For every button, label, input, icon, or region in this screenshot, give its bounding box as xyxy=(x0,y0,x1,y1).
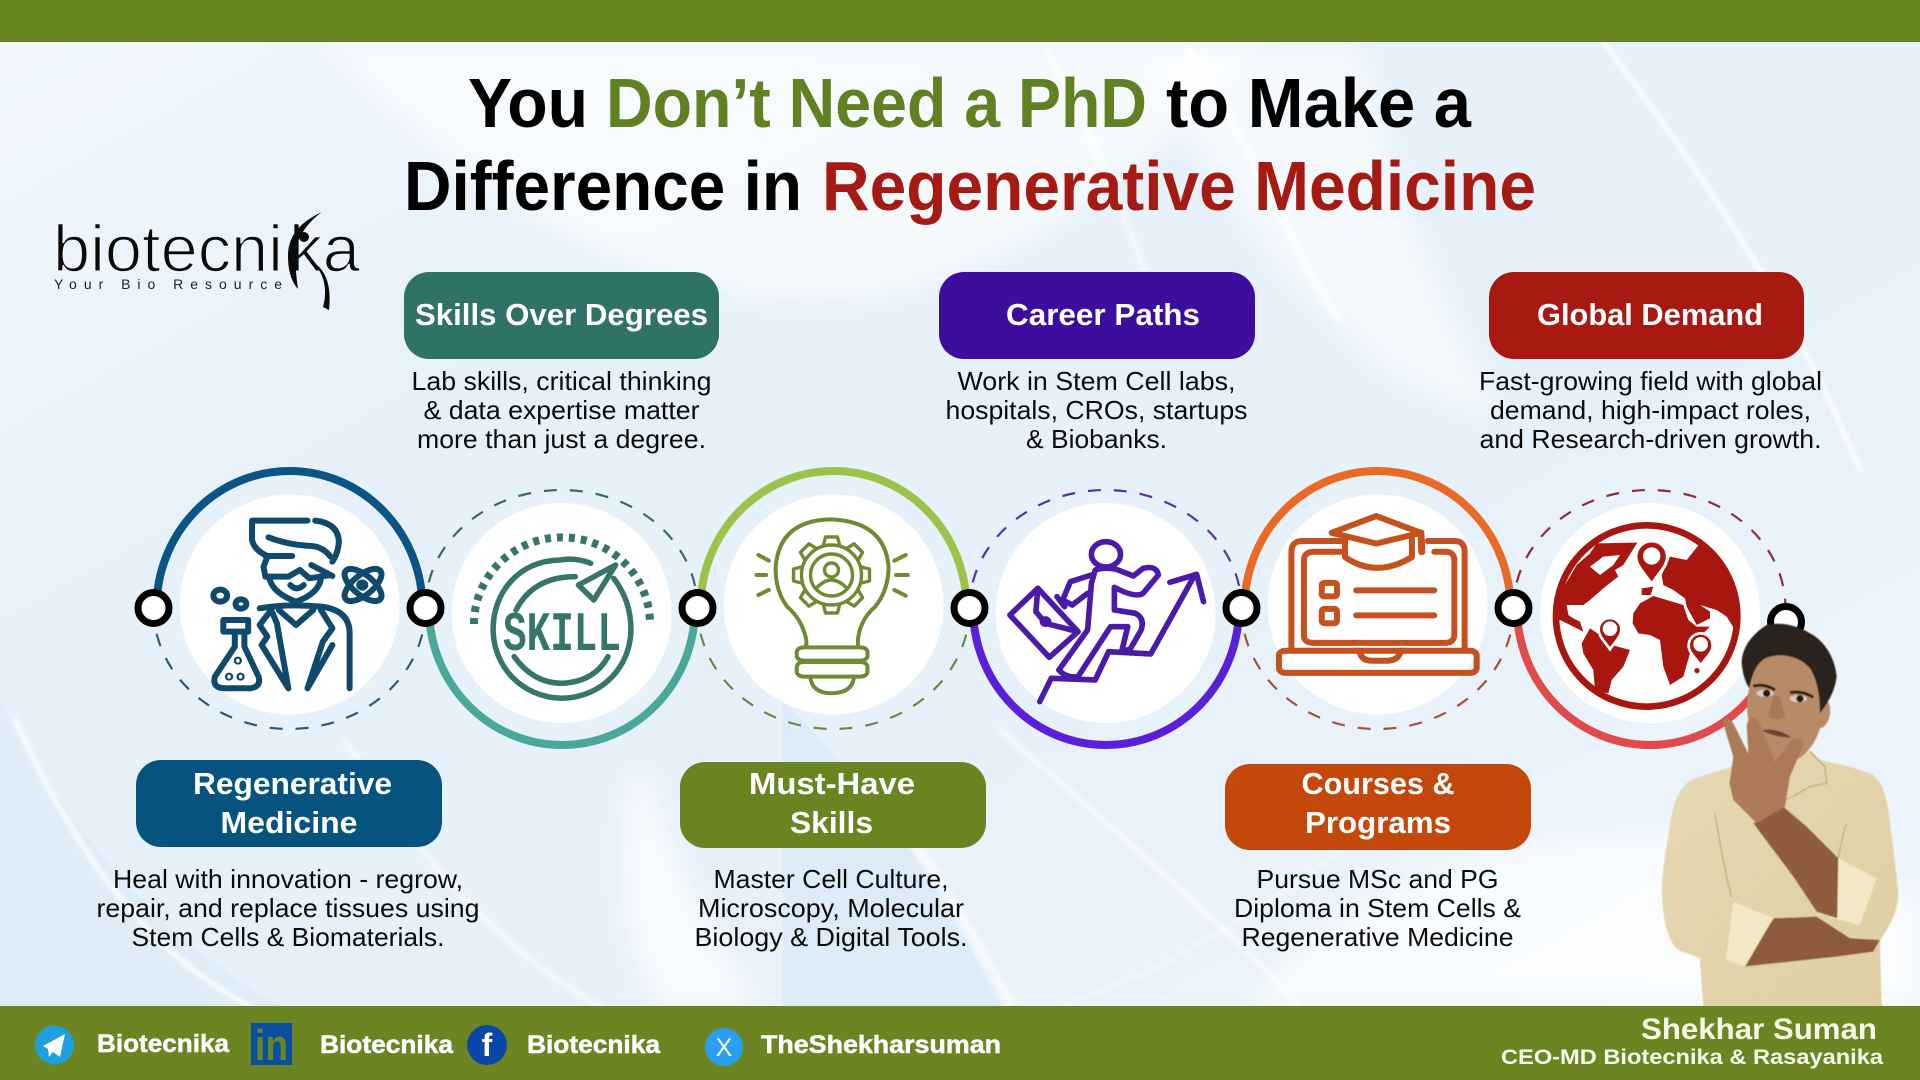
title: You xyxy=(468,64,588,142)
title: to Make a xyxy=(1166,64,1472,142)
text: Must-Have Skills description: Biology & Digital Tools. xyxy=(694,922,968,952)
timeline nodes xyxy=(138,592,1802,638)
text: Regenerative Medicine description: Heal with innovation - regrow, xyxy=(113,864,463,894)
icon: climbing career figure xyxy=(1010,542,1204,702)
icon: facebook: f xyxy=(482,1027,493,1063)
title: Difference in xyxy=(404,147,802,225)
pill: Skills Over Degrees: Skills Over Degrees xyxy=(415,297,708,332)
pill: Regenerative Medicine xyxy=(136,760,442,847)
text: Must-Have Skills description: Master Cell Culture, xyxy=(714,864,948,894)
author credit xyxy=(1501,1013,1883,1069)
icon: X xyxy=(705,1028,743,1066)
text: Global Demand description: Fast-growing field with global xyxy=(1479,366,1822,396)
pill: Courses and Programs xyxy=(1225,764,1531,850)
author credit: CEO-MD Biotecnika & Rasayanika xyxy=(1501,1046,1883,1069)
title: Regenerative Medicine xyxy=(822,147,1536,225)
dashed connector arcs xyxy=(154,490,1786,729)
pill: Skills Over Degrees xyxy=(404,272,719,359)
pill: Must-Have Skills: Must-Have xyxy=(749,766,915,801)
pill: Courses and Programs: Courses & xyxy=(1302,766,1454,801)
text: Skills Over Degrees description xyxy=(412,366,712,454)
icon: skill gauge: SKILL xyxy=(503,603,621,667)
label: LinkedIn handle: Biotecnika xyxy=(320,1031,454,1059)
text: Skills Over Degrees description: & data expertise matter xyxy=(424,395,700,425)
pill: Must-Have Skills: Skills xyxy=(790,805,873,840)
icon: skill gauge xyxy=(474,537,650,698)
pin: Europe xyxy=(1636,541,1667,584)
icon: X: X xyxy=(716,1034,733,1062)
text: Career Paths description xyxy=(946,366,1248,454)
text: Skills Over Degrees description: Lab skills, critical thinking xyxy=(412,366,712,396)
pin: South America xyxy=(1599,618,1621,649)
icon: facebook xyxy=(467,1025,507,1065)
pin: Africa xyxy=(1689,633,1713,665)
pill: Career Paths xyxy=(939,272,1255,359)
pill: Regenerative Medicine: Regenerative xyxy=(193,766,392,801)
text: Courses and Programs description: Regenerative Medicine xyxy=(1242,922,1514,952)
icon: globe with location pins xyxy=(1553,525,1743,707)
icon: light bulb with gear xyxy=(757,519,908,693)
text: Global Demand description xyxy=(1479,366,1822,454)
text: Regenerative Medicine description: Stem Cells & Biomaterials. xyxy=(132,922,444,952)
text: Skills Over Degrees description: more than just a degree. xyxy=(417,424,706,454)
pill: Global Demand xyxy=(1489,272,1804,359)
logo: biotecnika xyxy=(53,212,360,310)
pill: Global Demand: Global Demand xyxy=(1537,297,1763,332)
text: Career Paths description: & Biobanks. xyxy=(1026,424,1167,454)
title: Don’t Need a PhD xyxy=(606,64,1147,142)
top bar xyxy=(0,0,1920,42)
text: Courses and Programs description: Pursue MSc and PG xyxy=(1256,864,1498,894)
icon: laptop with graduation cap xyxy=(1279,516,1477,673)
text: Courses and Programs description: Diploma in Stem Cells & xyxy=(1234,893,1521,923)
pill: Must-Have Skills xyxy=(680,762,986,848)
logo: biotecnika: Your Bio Resource xyxy=(54,276,282,292)
label: Telegram handle: Biotecnika xyxy=(97,1030,230,1058)
text: Global Demand description: and Research-driven growth. xyxy=(1480,424,1822,454)
pill: Regenerative Medicine: Medicine xyxy=(220,805,358,840)
text: Global Demand description: demand, high-impact roles, xyxy=(1490,395,1811,425)
text: Courses and Programs description xyxy=(1234,864,1521,952)
text: Must-Have Skills description xyxy=(694,864,968,952)
title xyxy=(404,64,1536,225)
logo: biotecnika: biotecni xyxy=(53,212,283,286)
text: Regenerative Medicine description: repair, and replace tissues using xyxy=(96,893,480,923)
pill: Career Paths: Career Paths xyxy=(1006,297,1200,332)
icon: linkedin: in xyxy=(255,1021,288,1070)
portrait: thinking man xyxy=(1662,624,1898,1007)
text: Regenerative Medicine description xyxy=(96,864,480,952)
logo: biotecnika: ka xyxy=(289,212,360,286)
pill: Courses and Programs: Programs xyxy=(1305,805,1451,840)
label: X handle: TheShekharsuman xyxy=(761,1031,1001,1059)
solid connector arcs xyxy=(156,471,1783,745)
label: Facebook handle: Biotecnika xyxy=(527,1031,661,1059)
white circles behind icons xyxy=(180,494,1760,723)
icon: scientist xyxy=(213,521,387,688)
text: Must-Have Skills description: Microscopy, Molecular xyxy=(698,893,964,923)
text: Career Paths description: hospitals, CROs, startups xyxy=(946,395,1248,425)
icon: telegram xyxy=(35,1026,74,1064)
footer bar xyxy=(0,1006,1920,1080)
text: Career Paths description: Work in Stem Cell labs, xyxy=(958,366,1236,396)
author credit: Shekhar Suman xyxy=(1641,1013,1877,1046)
